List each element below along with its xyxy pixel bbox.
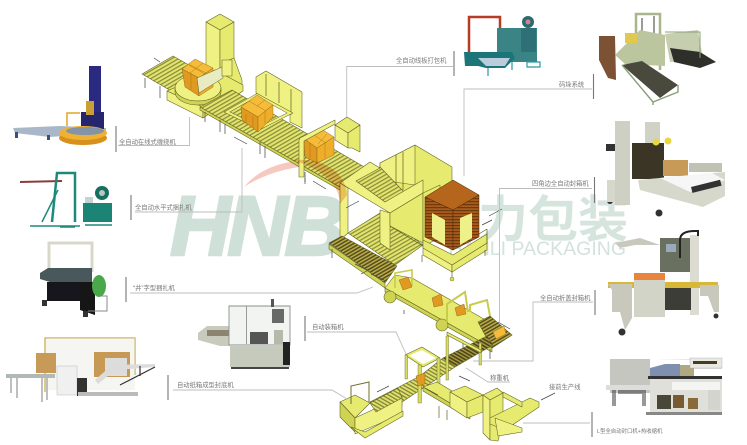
side rolls — [384, 291, 396, 303]
watermark: english name: HANLI PACKAGING — [449, 238, 626, 260]
photo: L-type sealer and shrink tunnel — [606, 358, 722, 415]
turntable wrapping station — [142, 14, 243, 118]
arrow: to preceding line — [541, 393, 555, 400]
label: connect to preceding line: 接前生产线 — [549, 382, 581, 391]
label: palletizing system: 码垛系统 — [559, 80, 585, 88]
label: weighing machine: 称重机 — [490, 373, 510, 382]
label: online stretch wrapper: 全自动在线式缠绕机 — [119, 137, 176, 146]
photo: four-corner case sealer — [606, 121, 725, 216]
pallet stack — [425, 180, 492, 250]
label: automatic case packer: 自动装箱机 — [312, 322, 344, 331]
label: four-corner case sealer: 四角边全自动封箱机 — [532, 178, 589, 188]
photo: carton erecting and bottom sealing machine — [6, 338, 155, 402]
palletizer back wall — [380, 145, 452, 205]
watermark tint over conveyor — [292, 160, 347, 204]
photo: online wrapping machine — [13, 66, 107, 145]
photo: flap folding case sealer — [608, 231, 719, 336]
label: flap folding sealer: 全自动折盖封箱机 — [540, 293, 591, 302]
arrows — [346, 201, 502, 280]
photo: horizontal strapping machine — [20, 173, 112, 227]
palletizer central frame — [340, 145, 487, 281]
label: L-type sealer and shrink machine: L型全自动封口机+热收缩机 — [597, 427, 663, 435]
cartons — [399, 277, 412, 290]
photo: well-pattern strapping machine — [40, 243, 107, 317]
box conveyor with strapping stations — [384, 270, 512, 359]
watermark logo — [170, 161, 628, 273]
label: well-pattern strapping machine: “井”字型捆扎机 — [133, 283, 176, 292]
corner wrap station with box — [299, 117, 360, 184]
weighing unit and infeed tower — [423, 382, 539, 441]
main roller conveyor — [200, 90, 373, 193]
label: horizontal strapping machine: 全自动水平式捆扎机 — [135, 202, 192, 212]
photo: pallet strapping machine — [464, 16, 540, 76]
label: carton erecting machine: 自动纸箱成型封底机 — [177, 380, 234, 389]
label: pallet strapping machine: 全自动线板打包机 — [396, 56, 447, 64]
pallet infeed rollers — [356, 167, 404, 202]
palletizer front frame — [340, 162, 423, 213]
watermark: company name: 亿力包装 — [428, 192, 628, 248]
pallet platform — [423, 245, 452, 272]
turntable base — [167, 91, 203, 118]
strapping frame on conveyor — [227, 71, 302, 132]
wrapped pallet load — [182, 59, 213, 78]
film arm — [197, 67, 223, 93]
infeed conveyor — [142, 56, 205, 92]
watermark: red swoosh — [244, 161, 346, 187]
brown roller conveyor — [329, 236, 397, 288]
wrapper tower — [206, 14, 242, 95]
photo: automatic case packer — [198, 299, 290, 369]
watermark: HNB letters: HNB — [170, 179, 345, 273]
production line illustration — [142, 14, 539, 441]
photo: palletizing system — [599, 14, 716, 105]
callout lines — [116, 51, 595, 437]
carton feed box — [340, 382, 403, 438]
lower conveyor and gantry — [370, 332, 493, 406]
strapping arches — [395, 270, 412, 288]
